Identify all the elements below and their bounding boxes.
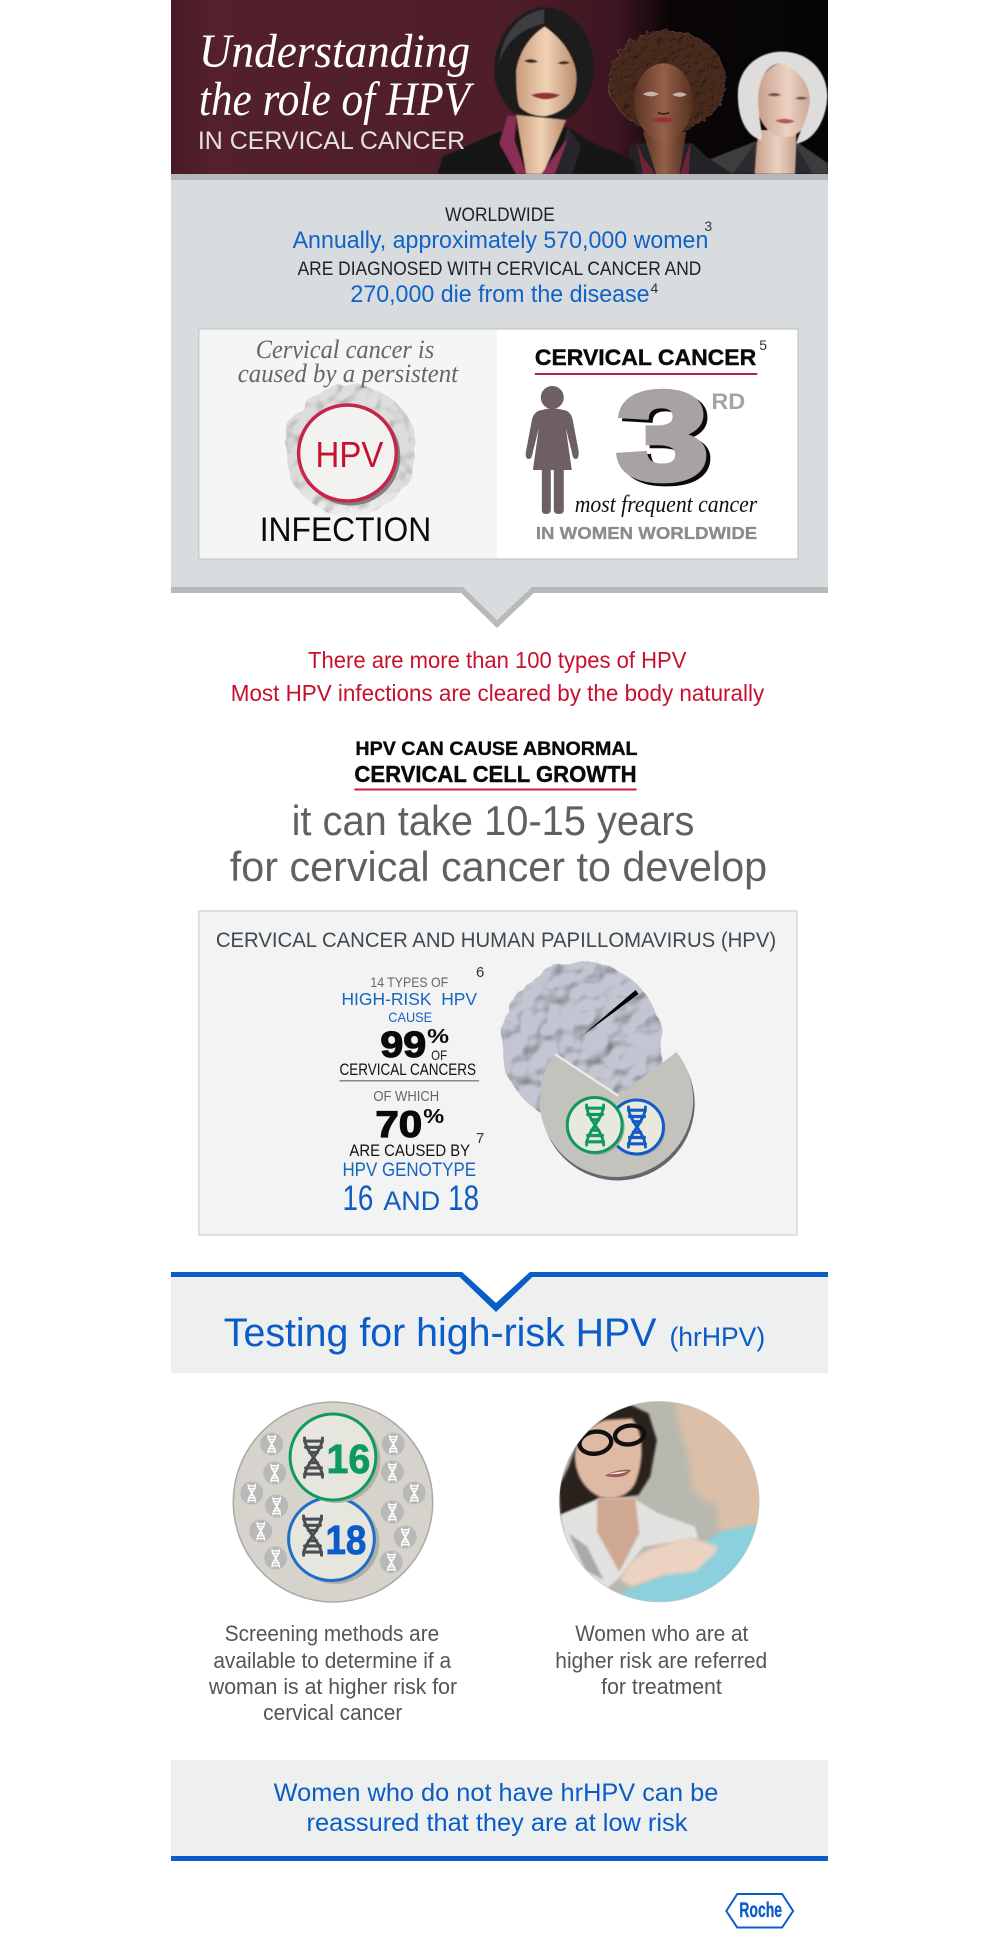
caption: screening methods: available to determine if a xyxy=(213,1648,452,1673)
worldwide text: 4 xyxy=(651,280,659,296)
statistics column: OF WHICH xyxy=(373,1088,439,1105)
statistics column: 7 xyxy=(476,1130,484,1147)
caption: screening methods: cervical cancer xyxy=(263,1700,402,1725)
statistics column: 18 xyxy=(448,1179,479,1218)
card: cause and rank xyxy=(199,329,798,559)
logo: Roche xyxy=(726,1894,793,1928)
heading: cervical cancer: CERVICAL CANCER xyxy=(535,345,756,370)
statistics column: OF xyxy=(431,1047,447,1063)
big number: 3rd: 3 xyxy=(617,367,708,506)
panel: reassurance message: reassured that they are at low risk xyxy=(307,1809,688,1837)
small DNA markers xyxy=(240,1432,426,1574)
doctor's coat xyxy=(560,1498,698,1590)
heading: cervical cancer xyxy=(535,337,767,375)
icon: woman xyxy=(526,386,579,514)
worldwide text xyxy=(293,205,712,308)
text block: 10-15 years: it can take 10-15 years xyxy=(292,797,694,844)
worldwide text: Annually, approximately 570,000 women xyxy=(293,227,708,254)
statistics column: 14 TYPES OF xyxy=(370,974,448,990)
logo: Roche: Roche xyxy=(739,1899,782,1922)
icon: HPV 16 and 18 screening dial xyxy=(233,1402,433,1602)
caption: cervical cancer is caused by xyxy=(238,335,459,388)
caption: cervical cancer is caused by: caused by a persistent xyxy=(238,359,459,388)
statistics column: 99 xyxy=(380,1024,426,1065)
photo: doctor with patient xyxy=(558,1401,760,1602)
arrow: pointer down xyxy=(171,587,828,628)
big number: 3rd: 3 xyxy=(621,370,712,509)
panel title: CERVICAL CANCER AND HUMAN PAPILLOMAVIRUS (HPV) xyxy=(216,929,776,952)
panel: worldwide statistics xyxy=(171,174,828,628)
patient's back xyxy=(672,1403,759,1532)
testing title: (hrHPV) xyxy=(669,1322,765,1352)
caption: referred for treatment: Women who are at xyxy=(575,1621,748,1646)
statistics column: 70 xyxy=(375,1104,422,1145)
text block: types of HPV: Most HPV infections are cleared by the body naturally xyxy=(231,680,764,706)
statistics column: % xyxy=(423,1106,444,1128)
wedge marker xyxy=(582,990,639,1036)
text block: types of HPV: There are more than 100 types of HPV xyxy=(308,647,687,673)
statistics column: HIGH-RISK HPV xyxy=(341,989,477,1009)
heading: cervical cancer: 5 xyxy=(759,337,767,353)
title xyxy=(200,34,474,149)
icon: blue DNA xyxy=(610,1100,665,1156)
text block: types of HPV xyxy=(231,647,764,706)
icon: HPV ring: HPV xyxy=(316,434,383,475)
worldwide text: WORLDWIDE xyxy=(445,205,555,226)
statistics column: CAUSE xyxy=(388,1009,432,1025)
woman 1 xyxy=(438,7,636,174)
panel: testing heading xyxy=(171,1272,828,1373)
woman 3 xyxy=(706,52,828,174)
statistics column: 16 xyxy=(342,1179,373,1218)
statistics column: ARE CAUSED BY xyxy=(349,1142,470,1160)
statistics column: HPV GENOTYPE xyxy=(342,1160,476,1181)
photo: three women xyxy=(438,7,828,174)
pie: 99 percent xyxy=(540,1052,695,1180)
heading: infection: INFECTION xyxy=(260,511,431,549)
caption: most frequent cancer: IN WOMEN WORLDWIDE xyxy=(536,523,757,543)
caption: most frequent cancer xyxy=(536,492,758,543)
statistics column: CERVICAL CANCERS xyxy=(339,1061,476,1079)
title: the role of HPV xyxy=(199,73,474,126)
mouth xyxy=(605,1470,631,1477)
title: IN CERVICAL CANCER xyxy=(198,127,465,155)
doctor's hair xyxy=(559,1404,657,1515)
heading: abnormal cell growth xyxy=(354,739,638,790)
heading: abnormal cell growth: CERVICAL CELL GROWTH xyxy=(354,761,637,787)
worldwide text: 270,000 die from the disease xyxy=(350,281,650,308)
worldwide text: ARE DIAGNOSED WITH CERVICAL CANCER AND xyxy=(298,259,701,280)
doctor's hand xyxy=(620,1537,718,1587)
panel: cervical cancer and HPV xyxy=(199,911,797,1235)
header banner xyxy=(171,0,828,174)
testing title: Testing for high-risk HPV xyxy=(224,1311,657,1355)
statistics column xyxy=(339,964,484,1218)
caption: referred for treatment: for treatment xyxy=(601,1674,722,1699)
badge: 16: 16 xyxy=(326,1436,370,1482)
icon: green DNA xyxy=(567,1098,625,1155)
statistics column: AND xyxy=(383,1186,440,1216)
blue arrow bar xyxy=(171,1272,828,1312)
badge: 16 xyxy=(290,1414,380,1503)
caption: screening methods: woman is at higher risk for xyxy=(208,1674,457,1699)
caption: screening methods: Screening methods are xyxy=(225,1621,439,1646)
virus with pie slice xyxy=(501,962,695,1180)
badge: 18 xyxy=(289,1498,379,1584)
panel: reassurance message: Women who do not have hrHPV can be xyxy=(274,1779,718,1807)
caption: referred for treatment xyxy=(555,1621,767,1699)
statistics column: 6 xyxy=(476,964,484,981)
text block: 10-15 years xyxy=(230,797,767,890)
virus image xyxy=(285,384,416,516)
badge: 18: 18 xyxy=(326,1517,366,1563)
worldwide text: 3 xyxy=(704,218,712,234)
doctor's face xyxy=(575,1418,642,1499)
caption: cervical cancer is caused by: Cervical cancer is xyxy=(256,335,434,364)
woman 2 xyxy=(609,30,733,174)
glasses xyxy=(578,1424,645,1456)
caption: most frequent cancer: most frequent cancer xyxy=(575,492,758,518)
panel: reassurance message xyxy=(171,1760,828,1861)
statistics column: % xyxy=(427,1026,449,1048)
heading: abnormal cell growth: HPV CAN CAUSE ABNORMAL xyxy=(355,739,638,760)
big number: 3rd: RD xyxy=(711,389,745,414)
caption: screening methods xyxy=(208,1621,457,1725)
patient's sleeve xyxy=(618,1522,756,1602)
caption: referred for treatment: higher risk are referred xyxy=(555,1648,767,1673)
big number: 3rd xyxy=(617,367,745,509)
icon: HPV ring xyxy=(299,405,400,506)
text block: 10-15 years: for cervical cancer to develop xyxy=(230,843,767,890)
title: Understanding xyxy=(199,25,470,78)
